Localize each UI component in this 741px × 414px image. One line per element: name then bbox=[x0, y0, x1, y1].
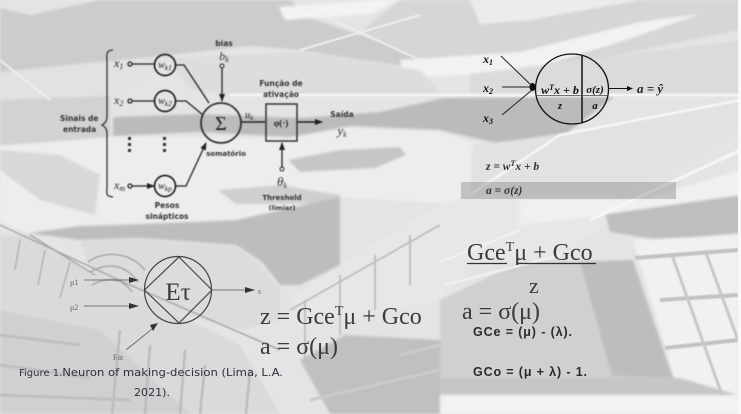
fraction equation: z bbox=[529, 273, 539, 298]
synaptic weights label: sinápticos bbox=[145, 212, 189, 221]
bias input: b bbox=[219, 49, 225, 63]
activation function label: Função de bbox=[259, 79, 303, 88]
formula: z and a bbox=[485, 159, 539, 197]
figure caption: 2021). bbox=[134, 386, 170, 399]
activation function box: u bbox=[245, 110, 250, 121]
threshold input: k bbox=[283, 181, 287, 190]
threshold input bbox=[262, 143, 302, 212]
threshold input: θ bbox=[277, 174, 283, 189]
output label: y bbox=[337, 123, 343, 138]
synaptic weights label: Pesos bbox=[155, 201, 180, 210]
equations: a = σ(μ) bbox=[260, 334, 338, 360]
activation function label bbox=[259, 79, 303, 99]
input Fat bbox=[113, 323, 158, 362]
output label: k bbox=[343, 130, 347, 139]
threshold input: (limiar) bbox=[268, 204, 296, 212]
inputs and weights: w bbox=[158, 181, 165, 192]
label: sinais de entrada: Sinais de bbox=[60, 114, 98, 123]
output label bbox=[330, 110, 354, 139]
neuron circle: z bbox=[557, 101, 563, 112]
inputs: x bbox=[483, 52, 489, 66]
activation function box: φ(·) bbox=[274, 118, 288, 128]
activation function box bbox=[241, 104, 322, 141]
inputs: x bbox=[483, 81, 489, 95]
output arrow bbox=[609, 81, 663, 96]
inputs and weights: x bbox=[114, 56, 119, 70]
label: sinais de entrada: entrada bbox=[63, 125, 96, 134]
GCe and GCo formulas bbox=[473, 325, 587, 379]
fraction equation: Gce bbox=[467, 240, 506, 266]
output s: s bbox=[258, 287, 261, 296]
figure caption: Figure 1.Neuron of making-decision (Lima, L.A. bbox=[19, 366, 283, 379]
bias input: bias bbox=[215, 39, 233, 48]
input mu1: μ1 bbox=[70, 278, 78, 287]
formula: z and a: T bbox=[510, 159, 516, 168]
inputs and weights: w bbox=[158, 60, 165, 71]
activation function label: ativação bbox=[263, 90, 299, 99]
input mu2 bbox=[70, 303, 139, 312]
summation node bbox=[201, 103, 241, 143]
bias input bbox=[215, 39, 233, 101]
input Fat: Fat bbox=[113, 353, 124, 362]
neuron with diamond bbox=[144, 256, 212, 324]
neuron circle: T bbox=[549, 83, 555, 92]
inputs and weights: m bbox=[119, 184, 125, 193]
neuron circle: σ(z) bbox=[586, 84, 604, 96]
inputs and weights: 2 bbox=[119, 99, 123, 108]
input lines bbox=[501, 56, 532, 115]
input signals bracket bbox=[102, 50, 113, 197]
threshold input: Threshold bbox=[262, 194, 302, 202]
activation function box: k bbox=[250, 114, 254, 122]
inputs: 3 bbox=[488, 117, 493, 126]
summation node: Σ bbox=[215, 113, 227, 135]
fraction equation: T bbox=[506, 240, 515, 255]
input mu2: μ2 bbox=[70, 303, 78, 312]
GCe and GCo formulas: GCe = (μ) - (λ). bbox=[473, 325, 572, 339]
somatorio label: somatório bbox=[206, 150, 246, 158]
equations: z = Gce bbox=[260, 304, 335, 330]
fraction equation: a = σ(μ) bbox=[462, 299, 540, 325]
label: sinais de entrada bbox=[60, 114, 98, 134]
vertical ellipsis dots bbox=[128, 137, 166, 152]
inputs and weights: x bbox=[114, 178, 119, 192]
formula: z and a: x + b bbox=[514, 161, 539, 173]
inputs bbox=[482, 52, 493, 126]
inputs: 1 bbox=[489, 58, 493, 67]
neuron circle bbox=[530, 54, 608, 124]
GCe and GCo formulas: GCo = (μ + λ) - 1. bbox=[473, 365, 587, 379]
neuron circle: a bbox=[592, 101, 598, 112]
input mu1 bbox=[70, 277, 139, 287]
inputs and weights: k2 bbox=[165, 99, 172, 108]
neuron circle: w bbox=[541, 83, 549, 97]
inputs: x bbox=[483, 111, 489, 125]
fraction equation bbox=[462, 240, 596, 325]
inputs and weights: k1 bbox=[165, 63, 172, 72]
formula: z and a: z = w bbox=[486, 161, 510, 173]
inputs: 2 bbox=[488, 87, 493, 96]
inputs and weights: 1 bbox=[119, 62, 123, 71]
inputs and weights bbox=[113, 54, 209, 196]
inputs and weights: x bbox=[114, 93, 119, 107]
bias input: k bbox=[225, 55, 229, 64]
output arrow: a = ŷ bbox=[637, 81, 663, 96]
neuron label: Eτ bbox=[165, 279, 191, 306]
equations bbox=[260, 304, 422, 360]
synaptic weights label bbox=[145, 201, 189, 221]
output s bbox=[212, 287, 261, 296]
equations: μ + Gco bbox=[343, 304, 422, 330]
output label: Saída bbox=[330, 110, 354, 119]
fraction equation: μ + Gco bbox=[514, 240, 593, 266]
inputs and weights: w bbox=[158, 96, 165, 107]
neuron circle: x + b bbox=[553, 83, 579, 97]
formula: z and a: a = σ(z) bbox=[486, 185, 523, 197]
equations: T bbox=[335, 304, 344, 319]
figure caption bbox=[19, 366, 283, 399]
inputs and weights: kp bbox=[165, 184, 172, 193]
